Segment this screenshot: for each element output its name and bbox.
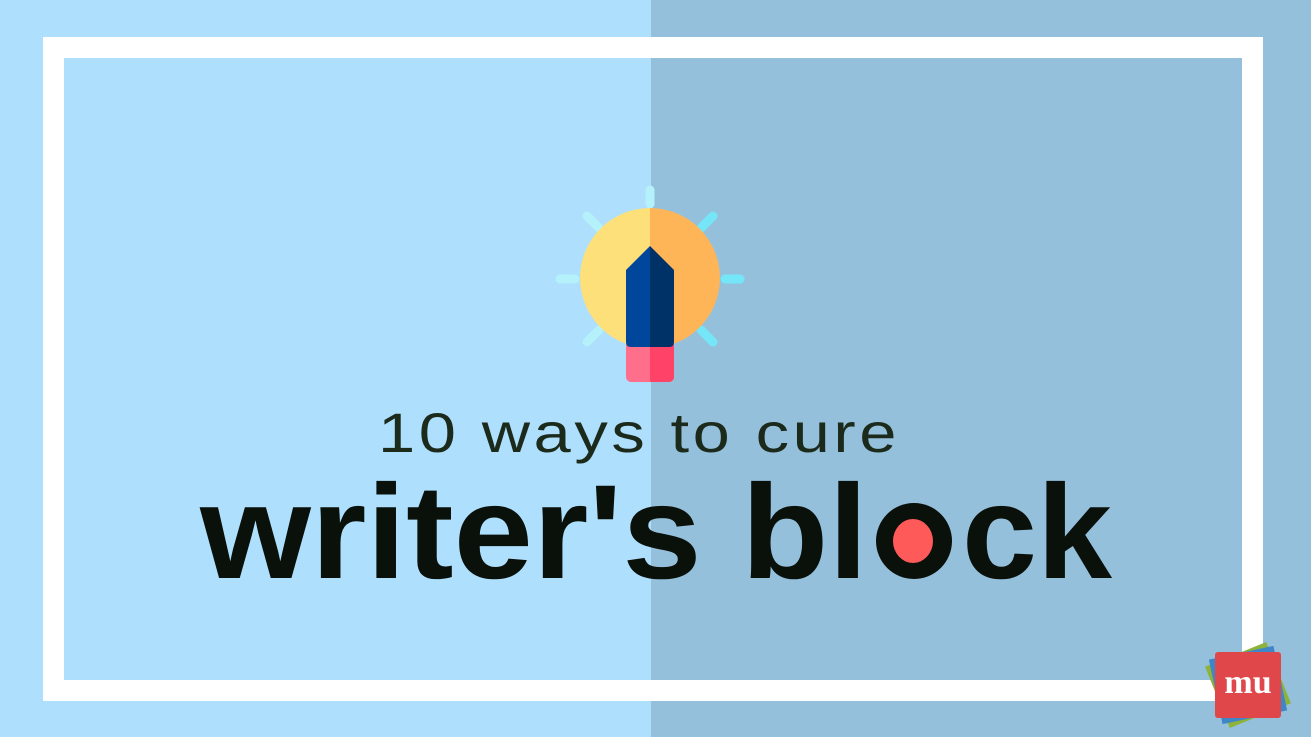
right half background	[651, 0, 1311, 737]
logo: mu	[1205, 642, 1291, 728]
icon: lightbulb pencil	[560, 190, 740, 382]
subtitle: 10 ways to cure	[378, 401, 900, 464]
title: ck	[962, 458, 1112, 607]
letter o with red centre	[876, 503, 952, 579]
title	[199, 458, 1112, 607]
logo: mu: mu	[1224, 664, 1272, 701]
title: writer's bl	[199, 458, 868, 607]
